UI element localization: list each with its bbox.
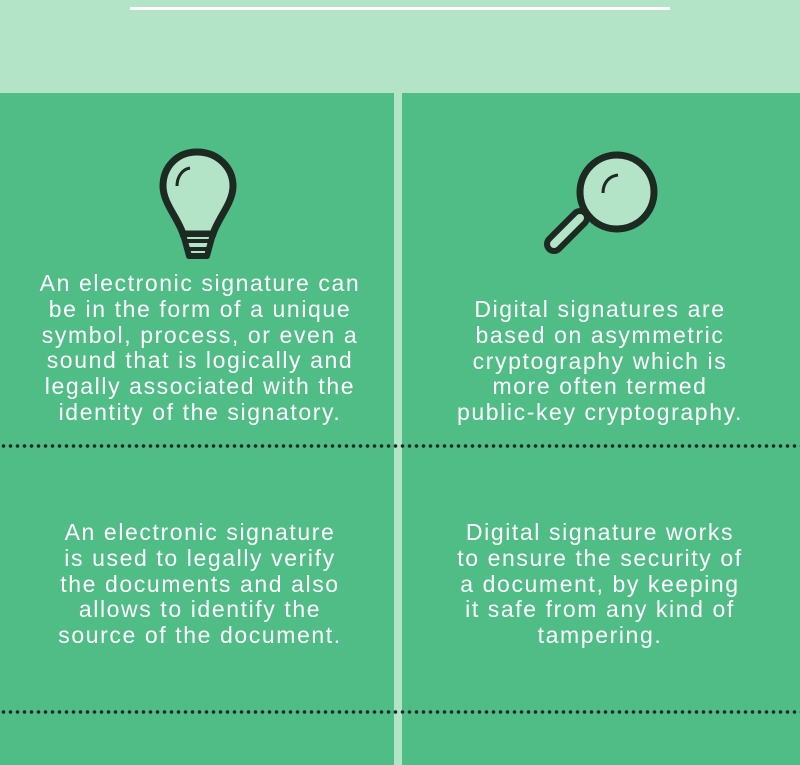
text: electronic signature use: is used to legally verify [64, 545, 336, 571]
text: electronic signature use: source of the document. [58, 622, 342, 648]
text: electronic signature use: An electronic signature [65, 519, 335, 545]
text: digital signature basis: more often termed [492, 373, 708, 399]
text: digital signature basis [457, 296, 743, 425]
text: electronic signature form: be in the form of a unique [49, 296, 351, 322]
text: electronic signature form: sound that is logically and [47, 347, 353, 373]
text: digital signature security: a document, by keeping [460, 571, 740, 597]
text: digital signature security: tampering. [538, 622, 662, 648]
text: electronic signature form: legally associated with the [45, 373, 355, 399]
text: electronic signature form: identity of the signatory. [59, 399, 341, 425]
text: electronic signature form: An electronic signature can [40, 270, 360, 296]
text: digital signature basis: Digital signatures are [474, 296, 726, 322]
text: electronic signature form [40, 270, 360, 425]
icon: light bulb [160, 148, 236, 259]
top band [0, 0, 800, 93]
text: digital signature basis: based on asymmetric [476, 322, 724, 348]
center divider [394, 93, 402, 765]
text: digital signature security: it safe from any kind of [465, 596, 735, 622]
text: electronic signature form: symbol, process, or even a [42, 322, 358, 348]
text: electronic signature use [58, 519, 342, 648]
text: digital signature security [457, 519, 743, 648]
text: electronic signature use: allows to identify the [79, 596, 321, 622]
text: digital signature security: Digital signature works [466, 519, 734, 545]
text: digital signature basis: public-key cryptography. [457, 399, 743, 425]
text: digital signature security: to ensure the security of [457, 545, 743, 571]
icon: magnifier [544, 152, 658, 254]
text: electronic signature use: the documents and also [60, 571, 340, 597]
text: digital signature basis: cryptography which is [473, 348, 727, 374]
